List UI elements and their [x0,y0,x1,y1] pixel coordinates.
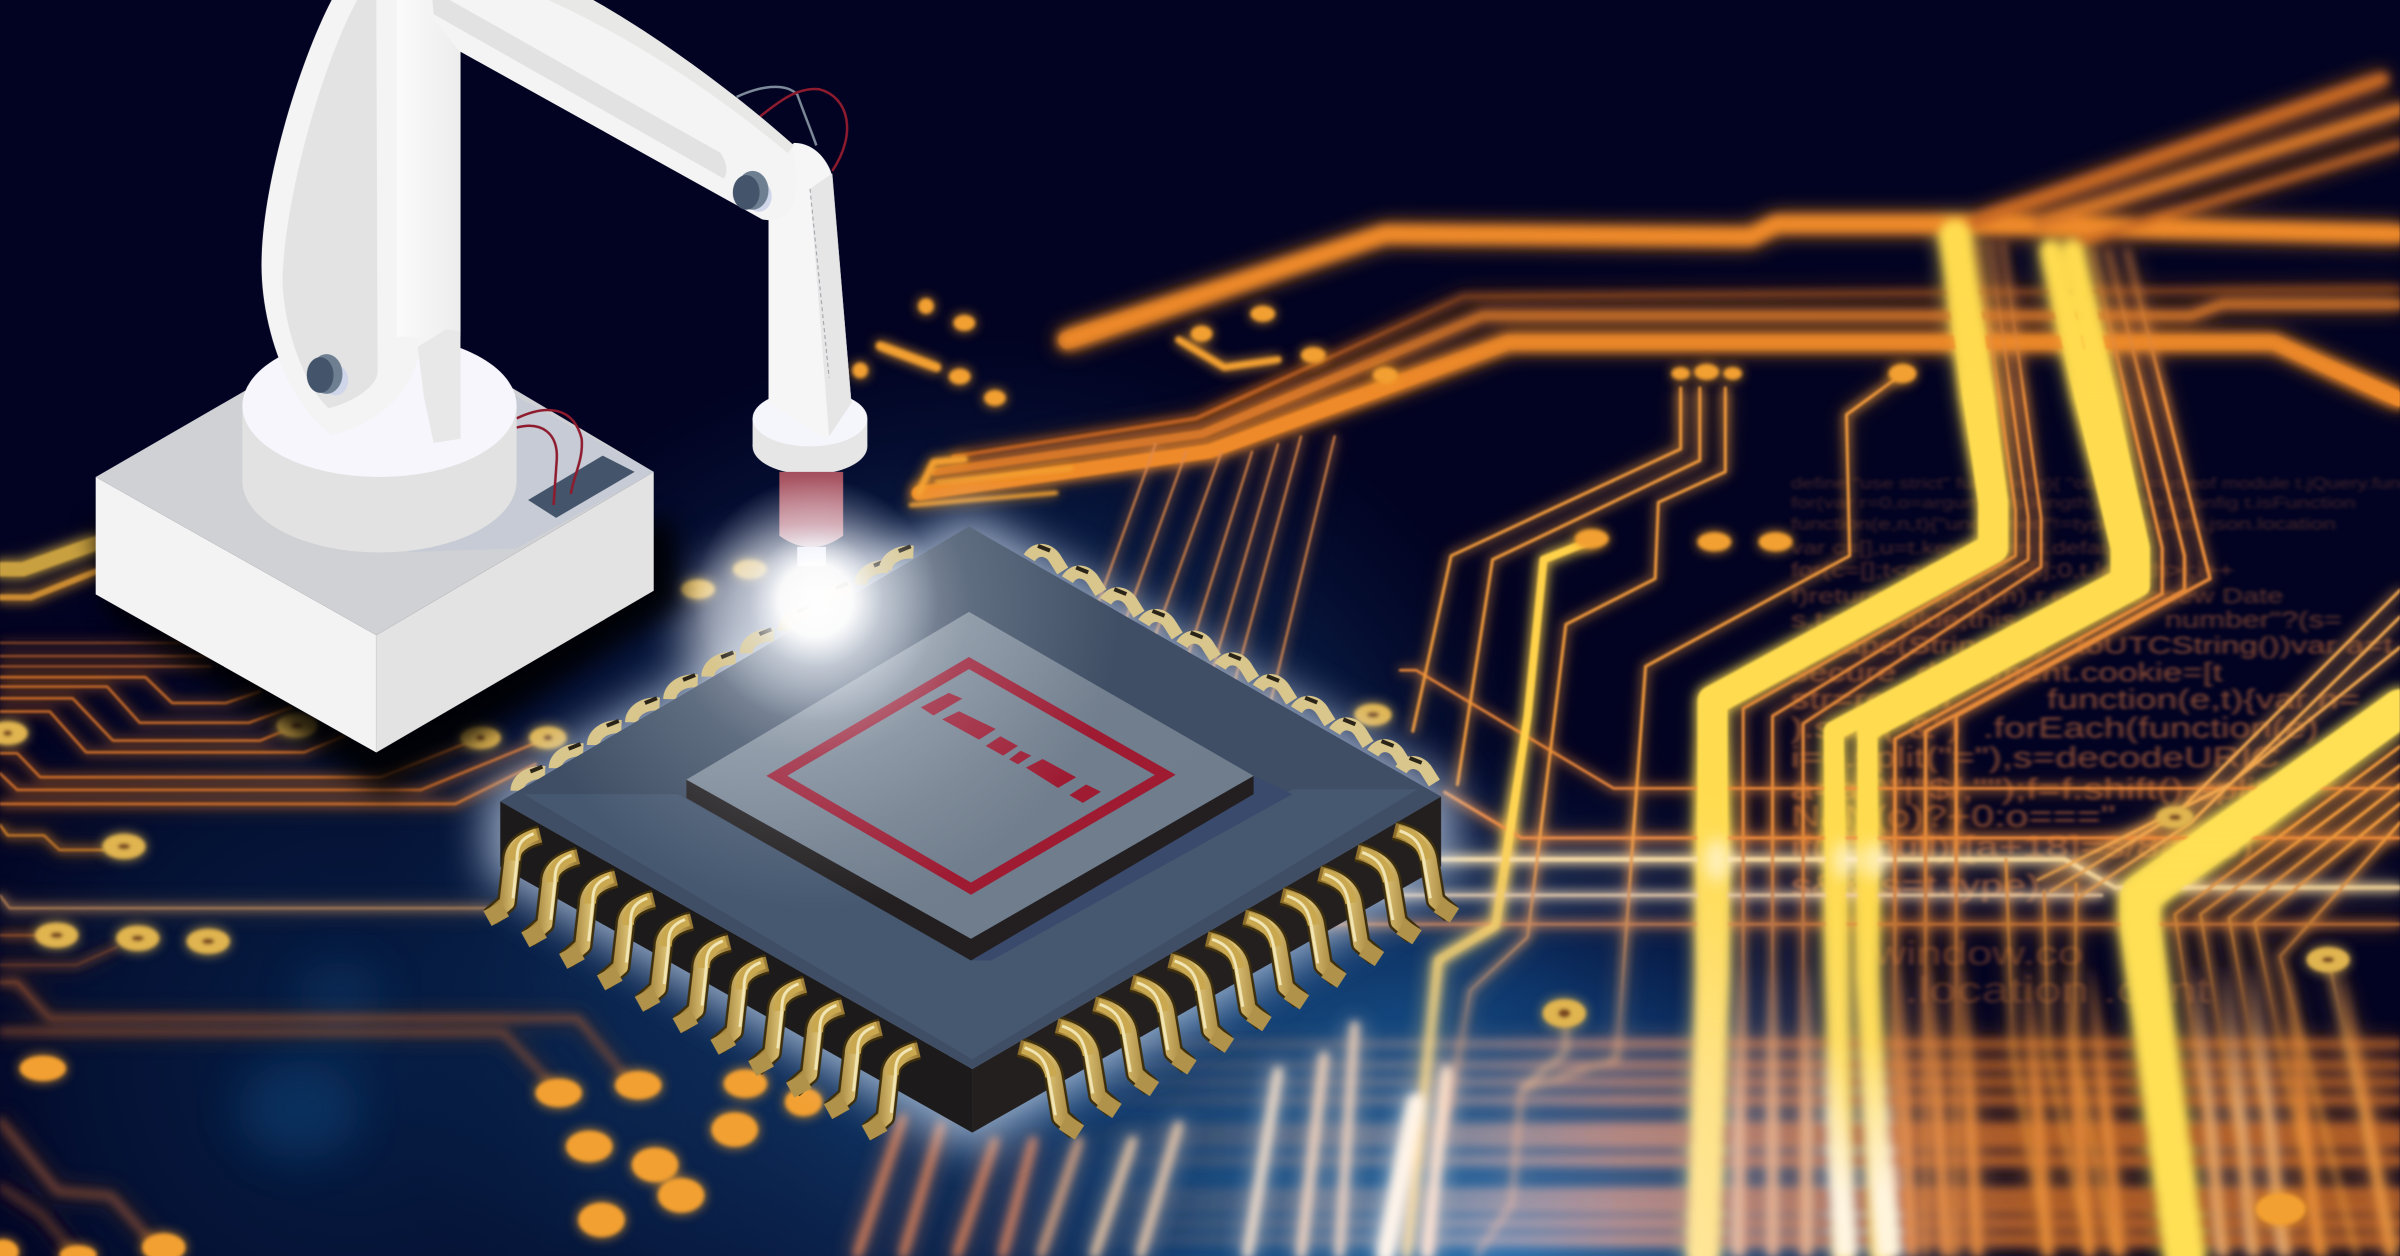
faint code text: s&&(s=t.type) [1791,868,2040,902]
robot arm [96,0,867,753]
front leads: left side [488,834,919,1133]
chip haze [501,527,1440,1133]
faint code text: window.co [1872,935,2083,972]
faint code text: function(e,t){var n= [2047,683,2360,715]
elbow pivot [733,171,772,212]
blue glow blobs [237,961,383,1159]
rotating cylinder [242,334,517,553]
faint code text: toUTCString())var a=t [2076,633,2393,659]
shoulder column [261,0,460,443]
faint code text: NaN(o)?+0:o===" [1791,799,2116,833]
red nozzle [779,472,843,566]
forearm [765,143,851,439]
back pins: top-left side [517,546,913,791]
faint code text: var c=[],u=t.key;return t.defaults [1791,537,2139,558]
faint code text: secure [1791,658,1896,687]
back pins: top-right side [1029,546,1434,783]
microchip [488,527,1454,1133]
light on chip [501,527,1440,1068]
faint code text: escape(String(n)) [1791,633,2046,659]
circuit pads [0,298,2349,1256]
upper arm [429,0,797,220]
faint code text: for(c=[];t<n;t++){s=e[i];0,t.length>i;i++ [1791,560,2234,582]
chip body [500,797,1441,1133]
faint code text: for(var r=0,o=arguments.length;o>r;r++){config t.isFunction [1791,495,2355,512]
die [686,612,1254,960]
chip top face [500,527,1441,1069]
circuit traces: sharp mid-board layer [0,288,2400,1026]
hot spots on traces [1704,839,1887,882]
front leads: right side [1019,830,1454,1133]
faint code text: str=return [1791,683,1951,715]
faint code text: s,t=+e.value;this. [1791,606,2025,633]
faint code text: a=a/^"|"$/,"");f=f.shift().split() [1791,772,2294,806]
faint code text: number"?(s= [2165,606,2342,633]
faint code text [1791,475,2400,1011]
red logo [777,663,1165,889]
top wires [737,87,847,171]
faint code text: i=e.split("="),s=decodeURIC [1791,742,2280,774]
robot base box [96,311,654,753]
welding spark [693,478,938,722]
faint code text: ).split("&") [1791,713,1960,744]
control panel and wires [517,410,635,518]
faint code text: .forEach(function(e) [1983,713,2319,744]
faint code text: document.cookie=[t [1917,658,2223,687]
faint code text: if(t!=null)r[a+18]=s/8a.20) [1791,829,2254,864]
faint code text: .location .cont [1904,971,2210,1011]
faint code text: function(e,n,t){"undefined"!=typeof s.path.json.location [1791,515,2336,534]
faint code text: f)return r;o.get(),n),r.expires=new Date [1791,585,2283,608]
tool head [753,390,867,474]
robot shadow [92,520,681,796]
lower pivot [307,354,348,395]
